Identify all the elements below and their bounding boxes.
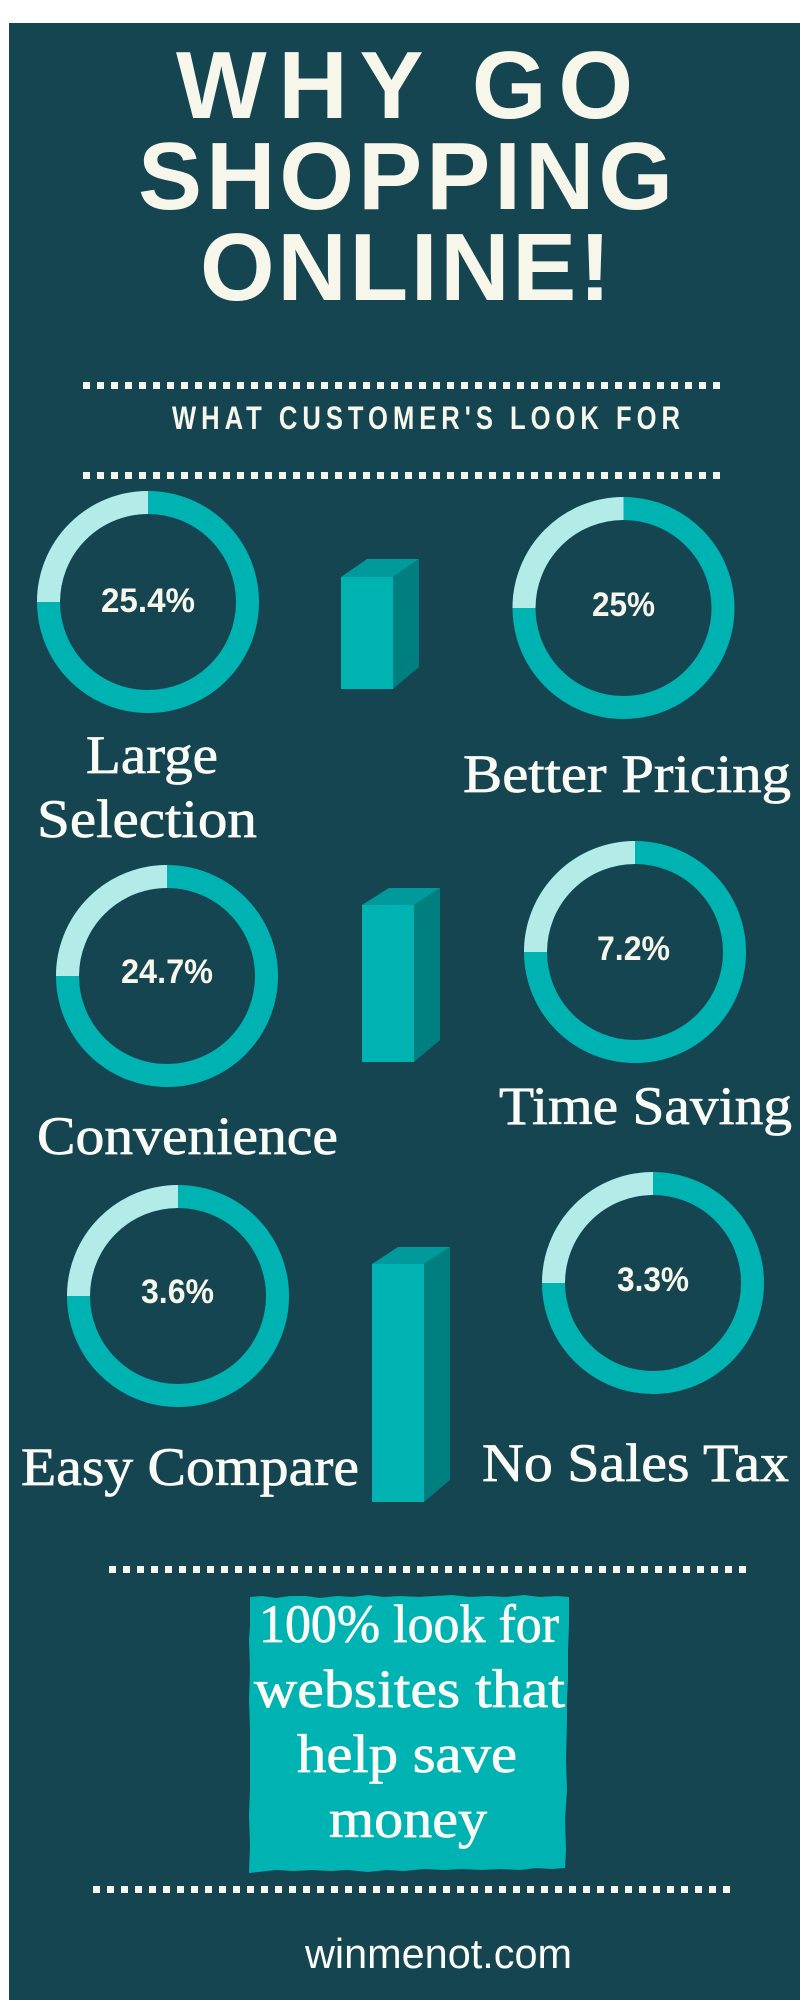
title: ONLINE! (200, 214, 611, 321)
subheading: WHAT CUSTOMER'S LOOK FOR (172, 401, 680, 437)
label: large selection (37, 725, 257, 849)
3d bar: row one (341, 559, 419, 689)
label: convenience: Convenience (37, 1106, 338, 1166)
label: large selection: Selection (37, 789, 257, 849)
title: WHY GO (176, 32, 633, 139)
callout: 100% look for websites that help save money: money (329, 1789, 487, 1849)
donut: time saving 7.2%: 7.2% (597, 930, 670, 968)
donut: better pricing 25% (524, 508, 723, 708)
donut: easy compare 3.6%: 3.6% (141, 1273, 214, 1311)
callout background (249, 1595, 569, 1873)
label: no sales tax: No Sales Tax (482, 1433, 789, 1493)
label: easy compare: Easy Compare (21, 1437, 359, 1497)
callout: 100% look for websites that help save money: 100% look for (259, 1594, 559, 1654)
title (138, 32, 673, 321)
donut: convenience 24.7% (68, 876, 266, 1076)
callout: 100% look for websites that help save money: websites that (254, 1659, 565, 1719)
3d bar: row two (362, 888, 440, 1062)
donut: better pricing 25%: 25% (592, 586, 655, 624)
label: better pricing: Better Pricing (463, 744, 791, 804)
donut: large selection 25.4% (48, 502, 248, 702)
donut: no sales tax 3.3%: 3.3% (617, 1261, 689, 1299)
callout: 100% look for websites that help save money: help save (297, 1724, 517, 1784)
donut: large selection 25.4%: 25.4% (101, 582, 195, 620)
label: time saving: Time Saving (499, 1076, 792, 1136)
donut: time saving 7.2% (536, 852, 734, 1052)
donut: easy compare 3.6% (78, 1196, 278, 1396)
label: large selection: Large (86, 725, 218, 785)
donut: convenience 24.7%: 24.7% (121, 953, 213, 991)
donut: no sales tax 3.3% (554, 1184, 752, 1382)
footer website: winmenot.com (304, 1930, 572, 1977)
3d bar: row three (372, 1247, 450, 1502)
title: SHOPPING (138, 123, 673, 230)
callout: 100% look for websites that help save money (249, 1594, 569, 1873)
